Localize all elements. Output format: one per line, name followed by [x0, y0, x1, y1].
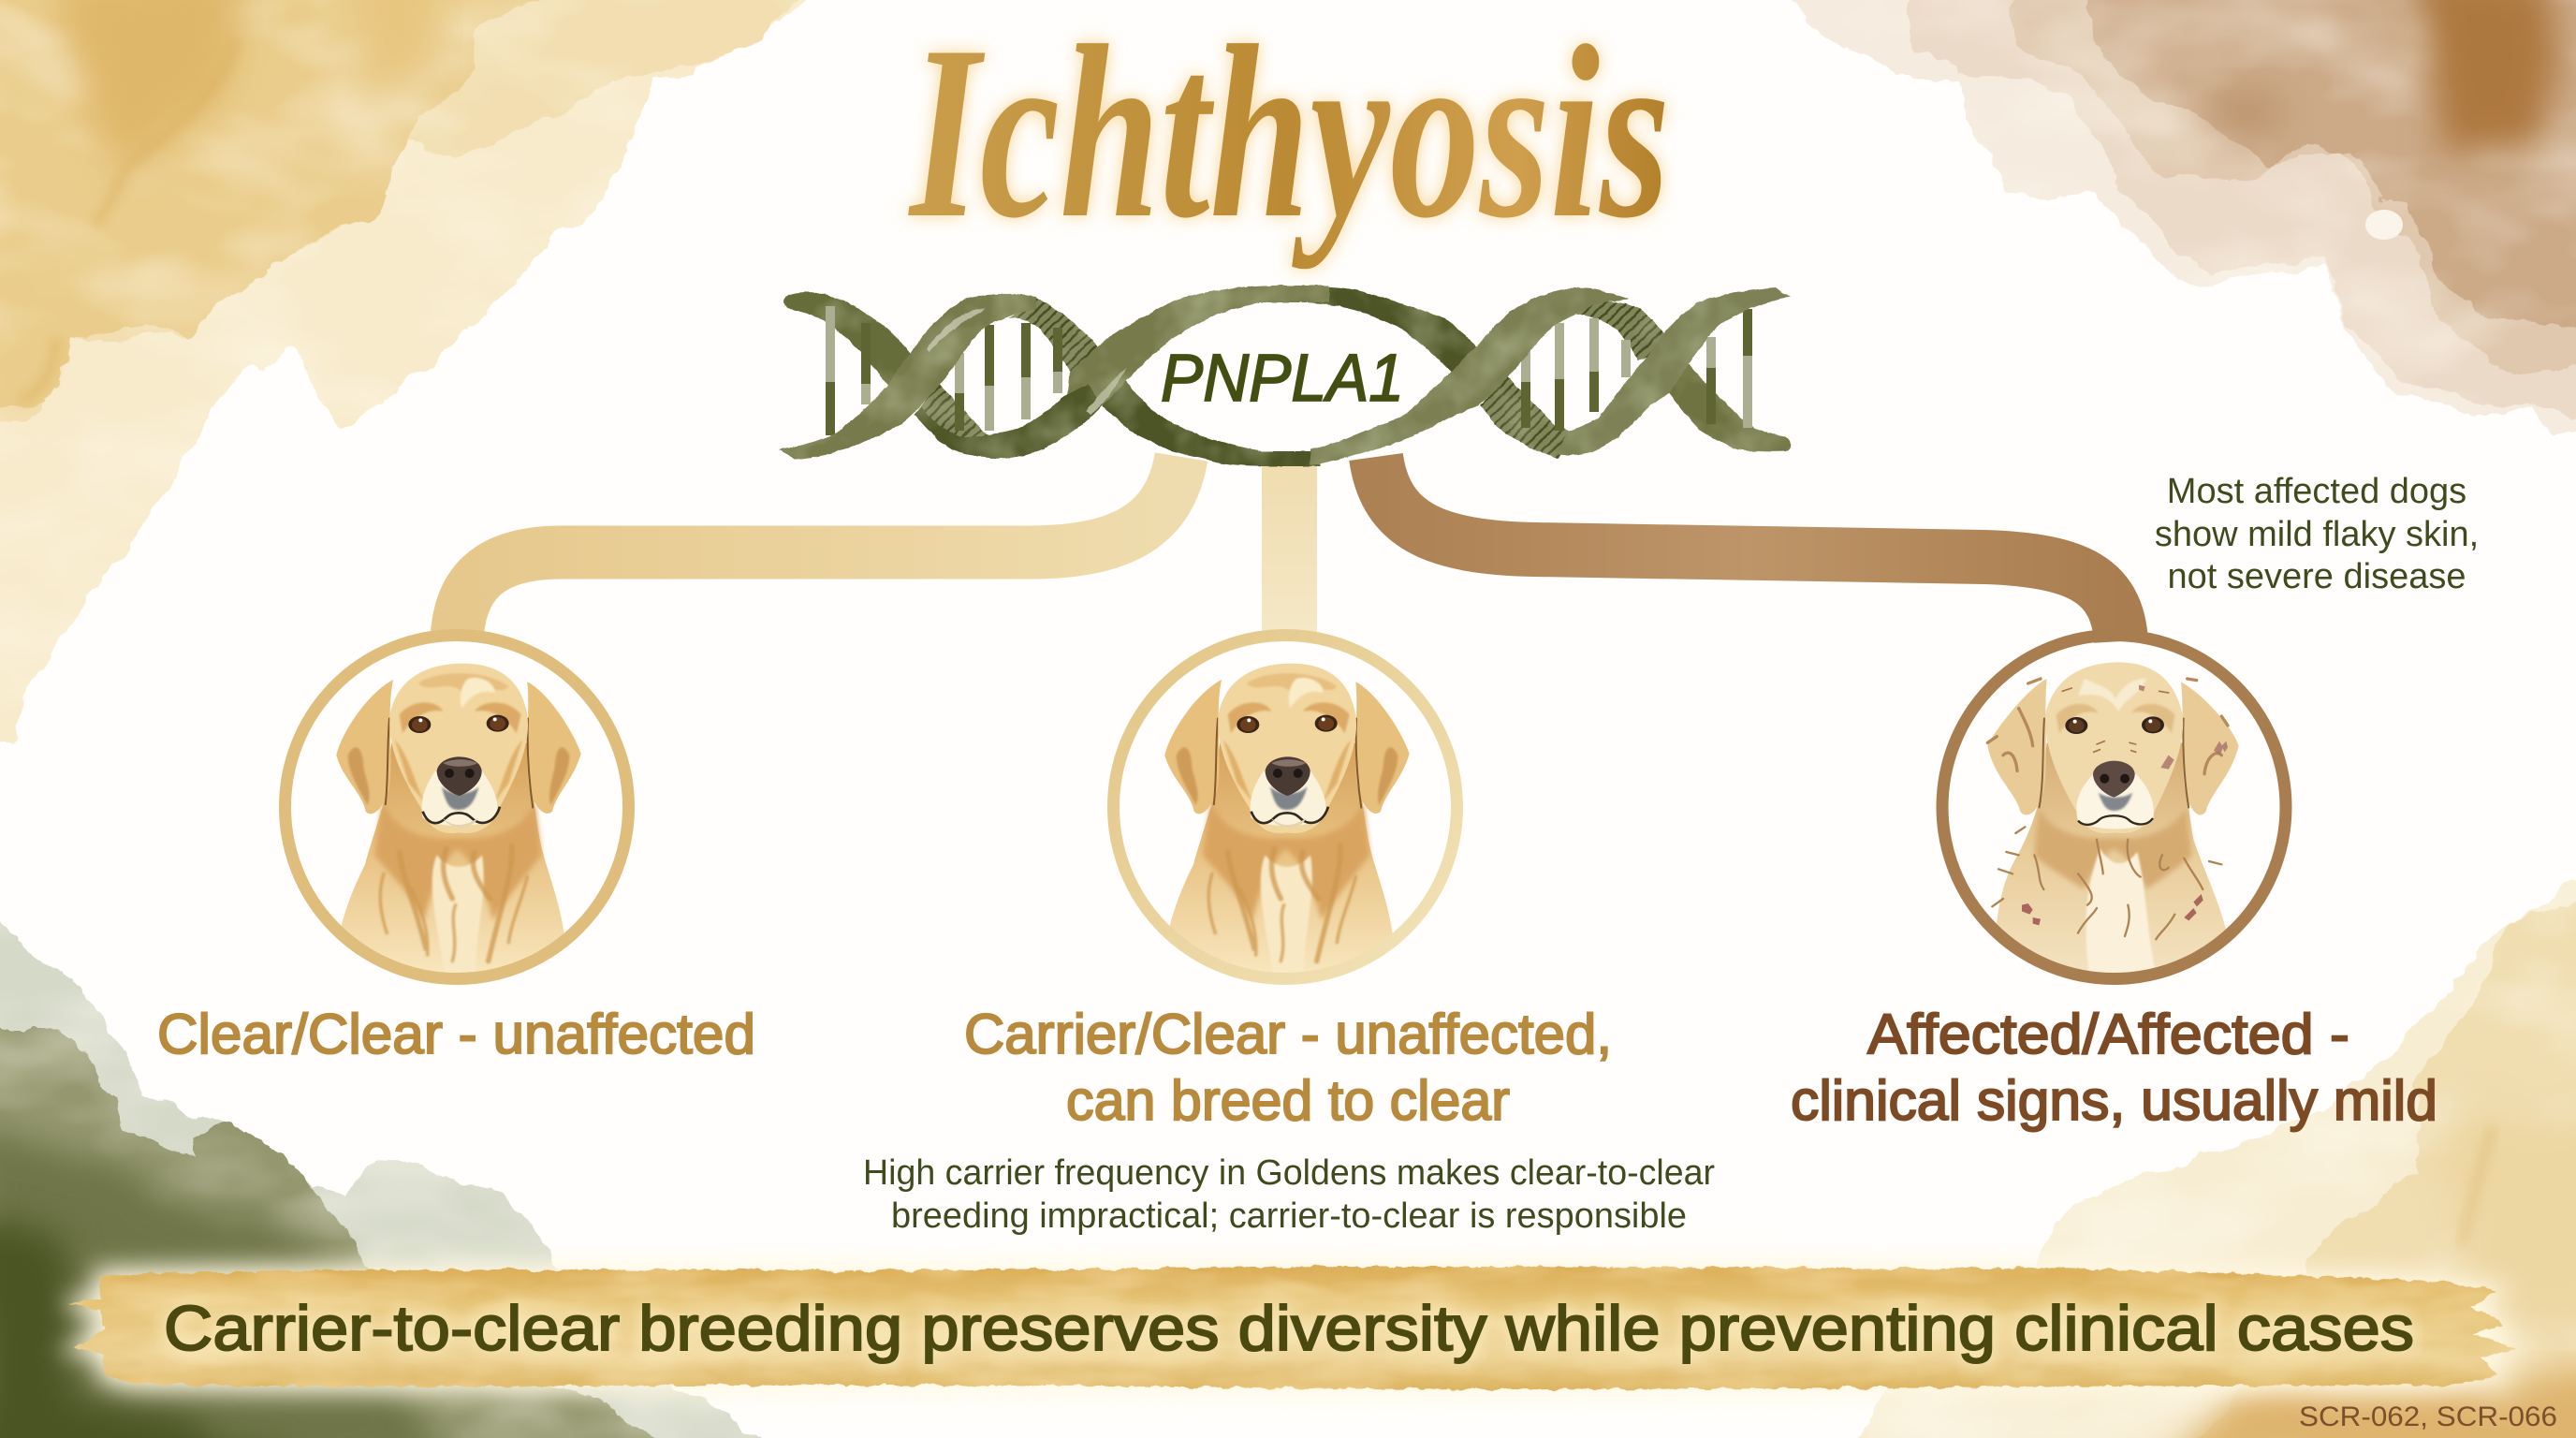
DNA helix with PNPLA1 label	[779, 286, 1791, 466]
label: affected: clinical signs, usually mild	[1791, 1069, 2437, 1132]
dog: affected	[1942, 635, 2286, 983]
watercolor wash: top left gold	[0, 0, 809, 740]
DNA rungs	[830, 306, 1748, 435]
note: mild signs: Most affected dogs	[2167, 472, 2466, 511]
connector: center ribbon to carrier dog	[1262, 457, 1317, 635]
label: affected	[1791, 1003, 2437, 1132]
gene label: PNPLA1	[1161, 342, 1404, 416]
note: carrier frequency: breeding impractical; carrier-to-clear is responsible	[891, 1196, 1687, 1236]
connector: right ribbon to affected dog	[1376, 457, 2121, 641]
note: carrier frequency	[863, 1153, 1715, 1236]
DNA back strands	[784, 286, 1791, 466]
label: affected: Affected/Affected -	[1867, 1003, 2349, 1065]
banner text: Carrier-to-clear breeding preserves diversity while preventing clinical cases	[164, 1293, 2414, 1364]
connector: left ribbon to clear dog	[457, 457, 1181, 641]
label: carrier: Carrier/Clear - unaffected,	[964, 1003, 1612, 1065]
note: mild signs: not severe disease	[2168, 557, 2466, 596]
DNA front strands	[779, 286, 1790, 465]
note: carrier frequency: High carrier frequency in Goldens makes clear-to-clear	[863, 1153, 1715, 1193]
dog: carrier	[1114, 635, 1456, 983]
watercolor wash: bottom right gold	[1821, 885, 2576, 1438]
title: Ichthyosis	[907, 0, 1670, 270]
watercolor wash: top right brown	[1776, 0, 2576, 433]
note: mild signs	[2155, 472, 2479, 596]
label: carrier: can breed to clear	[1066, 1069, 1510, 1132]
note: mild signs: show mild flaky skin,	[2155, 515, 2479, 554]
banner	[67, 1267, 2518, 1389]
label: clear: Clear/Clear - unaffected	[157, 1003, 755, 1065]
watercolor wash: bottom left green	[0, 924, 837, 1438]
source codes: SCR-062, SCR-066	[2299, 1401, 2557, 1432]
label: carrier	[964, 1003, 1612, 1132]
dog: clear	[285, 635, 629, 983]
